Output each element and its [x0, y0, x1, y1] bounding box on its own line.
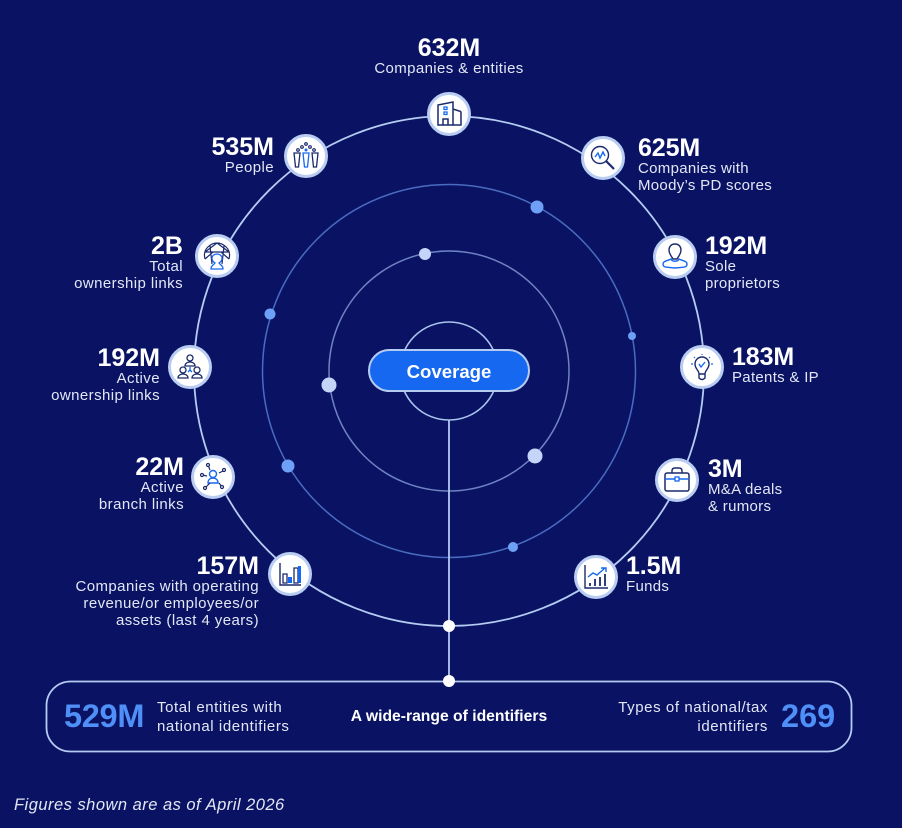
label: PD scores: 625M [638, 134, 700, 162]
label: active branch links [99, 453, 184, 513]
label: operating revenue companies: revenue/or employees/or [83, 595, 259, 612]
label: active branch links: Active [141, 479, 184, 496]
text: types of identifiers: Types of national/tax [618, 699, 768, 716]
icon: light bulb [682, 346, 722, 388]
panel heading: A wide-range of identifiers [351, 708, 547, 725]
label: funds: Funds [626, 578, 669, 595]
text: total entities [157, 699, 290, 735]
stat: 529M: 529M [64, 698, 144, 734]
footnote: Figures shown are as of April 2026 [14, 796, 285, 814]
label: companies: 632M [418, 34, 480, 62]
label: active ownership links: ownership links [51, 387, 160, 404]
coverage pill: Coverage [407, 361, 491, 382]
label: companies [374, 34, 524, 77]
icon: people [286, 136, 326, 176]
label: companies: Companies & entities [374, 60, 524, 77]
label: M&A deals: M&A deals [708, 481, 782, 498]
label: active ownership links: 192M [97, 344, 160, 372]
label: sole proprietors: Sole [705, 258, 736, 275]
label: sole proprietors: proprietors [705, 275, 780, 292]
middle orbit [262, 184, 636, 558]
icon: ownership network [196, 236, 238, 276]
label: active branch links: branch links [99, 496, 184, 513]
label: patents: Patents & IP [732, 369, 819, 386]
label: PD scores: Companies with [638, 160, 749, 177]
label: patents: 183M [732, 343, 794, 371]
label: operating revenue companies: 157M [196, 552, 259, 580]
label: operating revenue companies [75, 552, 259, 629]
text: types of identifiers: identifiers [697, 718, 768, 735]
center circle [400, 322, 498, 420]
coverage pill [368, 349, 530, 392]
icon: funds chart [576, 556, 616, 598]
label: active ownership links [51, 344, 160, 404]
label: funds [626, 552, 681, 595]
label: sole proprietors [705, 232, 780, 292]
icon: branch links [192, 456, 234, 498]
label: M&A deals [708, 455, 782, 515]
label: PD scores [638, 134, 772, 194]
label: total ownership links: ownership links [74, 275, 183, 292]
label: people: People [225, 159, 274, 176]
label: M&A deals: & rumors [708, 498, 771, 515]
connector line [443, 420, 455, 681]
text: total entities: national identifiers [157, 718, 290, 735]
text: total entities: Total entities with [157, 699, 282, 716]
label: operating revenue companies: Companies with operating [75, 578, 259, 595]
label: people [211, 133, 274, 176]
inner orbit [322, 248, 569, 491]
label: people: 535M [211, 133, 274, 161]
label: active branch links: 22M [135, 453, 184, 481]
stat: 269: 269 [781, 698, 835, 734]
label: M&A deals: 3M [708, 455, 743, 483]
icon: active ownership links [170, 346, 210, 388]
identifiers panel outline [46, 675, 852, 752]
label: funds: 1.5M [626, 552, 681, 580]
label: operating revenue companies: assets (last 4 years) [116, 612, 259, 629]
icon: briefcase [656, 460, 698, 500]
label: total ownership links: 2B [151, 232, 183, 260]
text: types of identifiers [618, 699, 768, 735]
label: total ownership links: Total [149, 258, 183, 275]
icon: companies building [428, 94, 470, 134]
label: sole proprietors: 192M [705, 232, 767, 260]
icon: sole proprietor [654, 236, 696, 278]
label: total ownership links [74, 232, 183, 292]
label: patents [732, 343, 819, 386]
label: PD scores: Moody’s PD scores [638, 177, 772, 194]
outer orbit [194, 116, 704, 626]
icon: bar chart [270, 554, 310, 594]
label: active ownership links: Active [117, 370, 160, 387]
icon: magnifier PD scores [582, 138, 624, 178]
